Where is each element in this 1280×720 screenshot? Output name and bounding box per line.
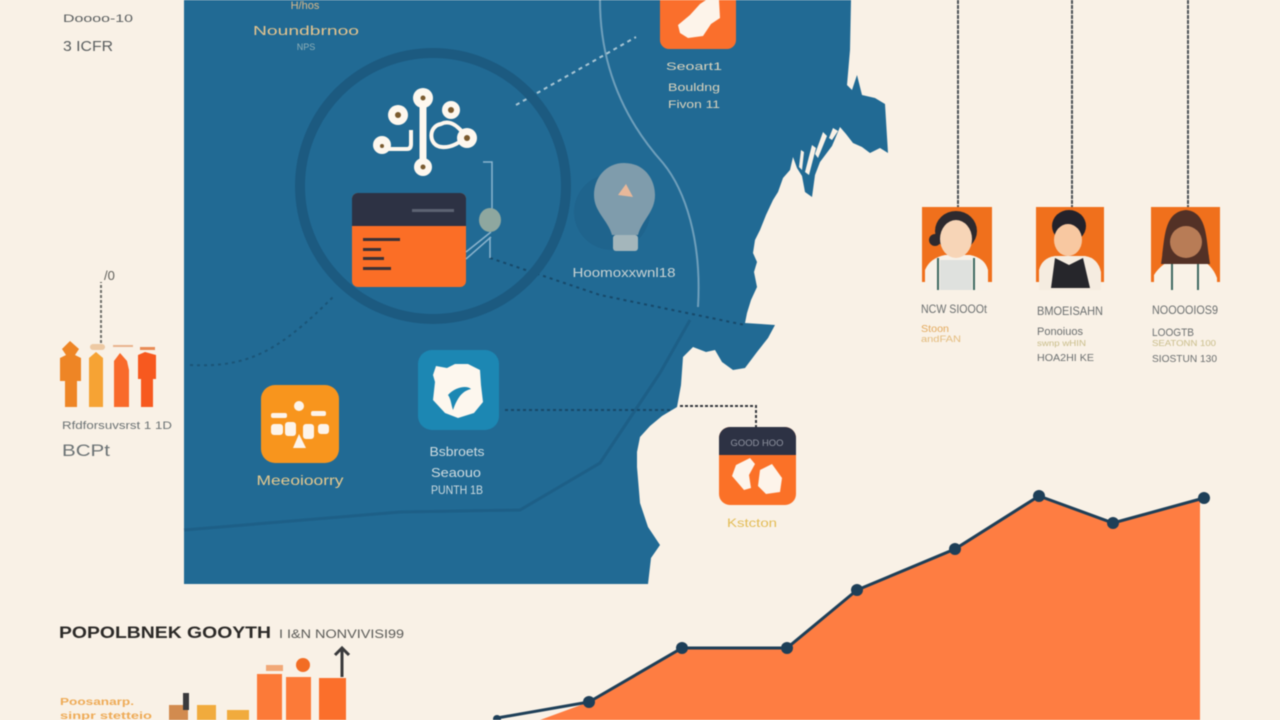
- left people chart: [60, 268, 156, 407]
- top-left label: [63, 13, 133, 55]
- area chart: [493, 490, 1210, 720]
- portrait captions: BMOEISAHN: [1037, 304, 1103, 318]
- drop lines: [958, 0, 1188, 207]
- top-center label: H/hos: [291, 0, 320, 12]
- top-center label: NPS: [297, 42, 315, 52]
- icon: light bulb: [574, 163, 655, 251]
- text: top tile caption: [666, 61, 722, 111]
- card: orange info card: [352, 193, 466, 287]
- portrait 2: [1036, 207, 1104, 290]
- top-left label: 3 ICFR: [63, 38, 113, 55]
- top-left label: Doooo-10: [63, 13, 133, 25]
- text: bulldog tile caption: Bsbroets: [430, 444, 485, 459]
- top-center label: [253, 0, 359, 52]
- icon: network nodes: [373, 88, 477, 176]
- portrait captions: SIOSTUN 130: [1152, 354, 1217, 365]
- bar chart: bottom left: [60, 648, 349, 720]
- heading: population growth: I I&N NONVIVISI99: [279, 627, 404, 641]
- leader line: [100, 282, 102, 343]
- text: top tile caption: Seoart1: [666, 61, 722, 73]
- portrait 1: [922, 207, 992, 290]
- text: bulldog tile caption: Seaouo: [431, 465, 481, 480]
- panel: blue map region: [184, 0, 888, 584]
- text: bulb caption: Hoomoxxwnl18: [572, 265, 676, 280]
- portrait captions: [921, 302, 1218, 365]
- bar chart: bottom left: Poosanarp.: [60, 697, 134, 708]
- text: tree tile caption: Meeoioorry: [256, 472, 344, 488]
- portrait row: [921, 0, 1220, 365]
- icon: coastal tile: [719, 427, 796, 505]
- icon: blue bulldog tile: [418, 350, 499, 430]
- text: people chart caption: Rfdforsuvsrst 1 1D: [62, 420, 172, 432]
- portrait captions: NOOOOIOS9: [1152, 303, 1218, 317]
- text: coastal tile caption: Kstcton: [727, 516, 777, 530]
- icon: coastal tile: GOOD HOO: [730, 438, 784, 448]
- text: top tile caption: Fivon 11: [668, 99, 720, 111]
- icon: orange tree tile: [261, 385, 339, 463]
- portrait captions: LOOGTB: [1152, 327, 1194, 339]
- top-center label: Noundbrnoo: [253, 23, 359, 38]
- coastline inlets: [799, 128, 838, 175]
- arrow: dashed connector to card: [680, 406, 756, 427]
- portrait captions: andFAN: [921, 334, 961, 344]
- icon: orange top tile: [660, 0, 736, 49]
- text: people chart caption: BCPt: [62, 441, 110, 460]
- text: people chart caption: [62, 420, 172, 460]
- text: bulldog tile caption: [430, 444, 485, 497]
- portrait captions: swnp wHIN: [1037, 339, 1086, 348]
- portrait captions: SEATONN 100: [1152, 339, 1217, 348]
- icon: connector hand: [466, 162, 501, 259]
- portrait 3: [1151, 207, 1220, 290]
- person figures: [60, 341, 156, 407]
- circle network graphic: [300, 53, 566, 319]
- heading: population growth: POPOLBNEK GOOYTH: [59, 623, 271, 642]
- portrait captions: HOA2HI KE: [1037, 353, 1094, 364]
- text: bulldog tile caption: PUNTH 1B: [431, 483, 483, 497]
- text: top tile caption: Bouldng: [668, 82, 720, 94]
- left people chart: /0: [104, 268, 115, 283]
- heading: population growth: [59, 623, 404, 642]
- portrait captions: NCW SIOOOt: [921, 302, 988, 316]
- portrait captions: Ponoiuos: [1037, 326, 1083, 338]
- portrait captions: Stoon: [921, 324, 949, 335]
